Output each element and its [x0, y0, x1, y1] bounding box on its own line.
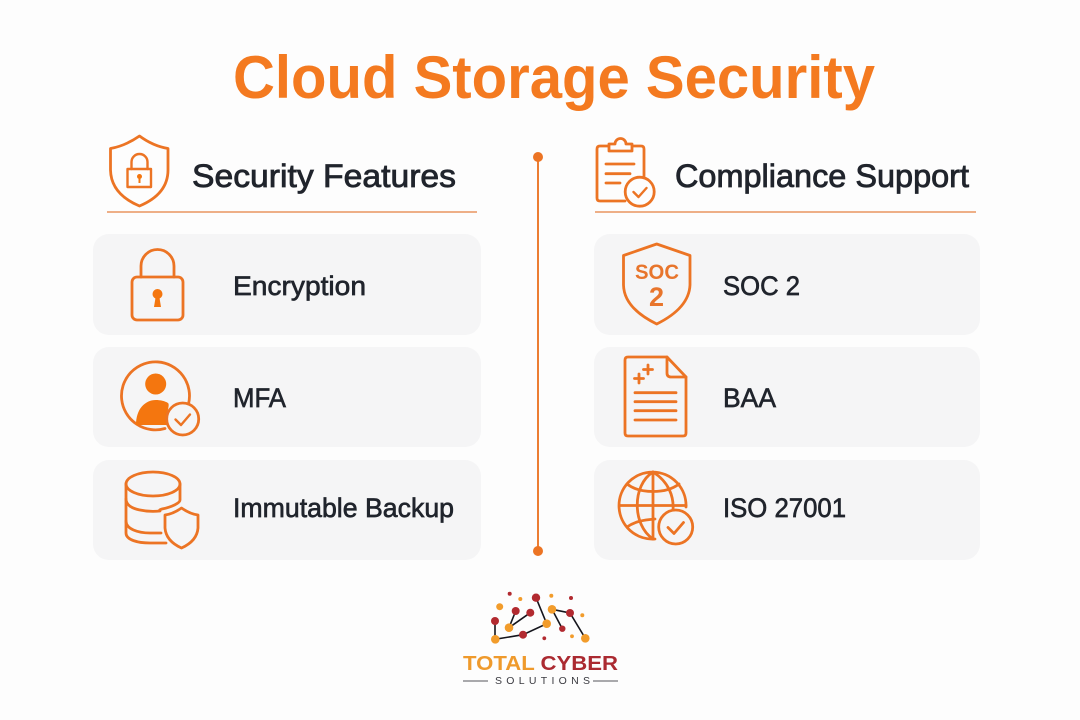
card: SOC 2 [594, 234, 980, 335]
label: encryption: Encryption [233, 271, 366, 301]
card: MFA [93, 347, 481, 447]
icon: SOC 2 shield: 2 [649, 282, 664, 312]
card: BAA [594, 347, 980, 447]
icon: shield with padlock [110, 136, 168, 206]
label: MFA: MFA [233, 383, 286, 413]
heading: security features: Security Features [192, 158, 456, 194]
logo network graphic [491, 592, 590, 644]
center divider with end dots [533, 152, 543, 556]
label: SOC 2: SOC 2 [723, 271, 800, 301]
panel: security features [93, 136, 481, 560]
icon: SOC 2 shield: SOC [635, 261, 679, 284]
icon: document with plus signs [625, 357, 686, 436]
card: ISO 27001 [594, 460, 980, 560]
logo wordmark: TOTAL CYBER [463, 653, 619, 675]
icon: user with check badge [121, 362, 199, 435]
label: ISO 27001: ISO 27001 [723, 493, 846, 523]
panel: compliance support [594, 139, 980, 560]
label: BAA: BAA [723, 383, 776, 413]
logo tagline: SOLUTIONS [495, 675, 590, 687]
icon: database with shield [126, 472, 198, 548]
heading: compliance support: Compliance Support [675, 158, 969, 194]
title: Cloud Storage Security [233, 44, 876, 111]
icon: clipboard with check badge [597, 139, 654, 206]
icon: SOC 2 shield [624, 244, 690, 324]
icon: padlock [132, 250, 183, 320]
card: immutable backup [93, 460, 481, 560]
icon: globe with check badge [619, 472, 693, 544]
card: encryption [93, 234, 481, 335]
logo: total cyber solutions [463, 592, 619, 687]
label: immutable backup: Immutable Backup [233, 493, 454, 523]
